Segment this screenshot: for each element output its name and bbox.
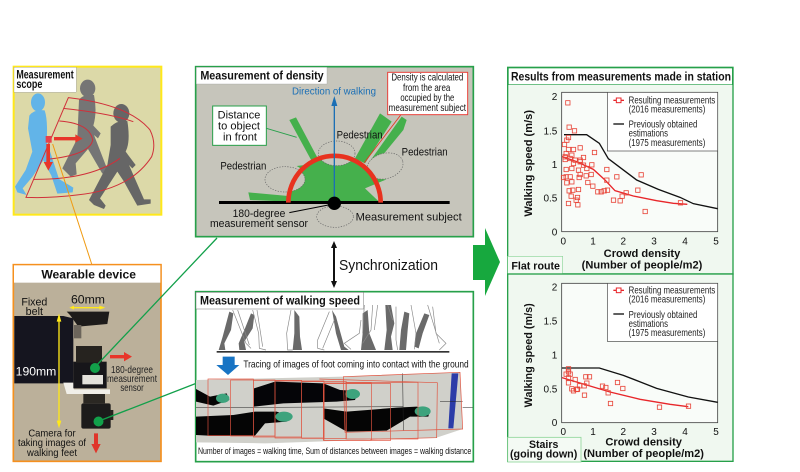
y axis labels: 1 <box>552 160 558 171</box>
label: fixed belt: belt <box>26 306 43 318</box>
label: 180-degree sensor: measurement sensor <box>210 218 308 230</box>
legend <box>607 283 718 341</box>
legend <box>607 92 718 151</box>
photo: belt and device <box>14 312 113 429</box>
arrow: direction of walking <box>292 86 376 202</box>
legend: (2016 measurements) <box>629 104 705 115</box>
figure: blue measurement subject <box>15 93 73 195</box>
y axis labels: 1 <box>552 350 558 361</box>
label: flat route <box>508 256 563 274</box>
x axis labels: 1 <box>590 427 596 438</box>
connector: sensor to density panel <box>95 238 217 367</box>
marker: sensor point <box>328 197 341 210</box>
x axis title: Crowd density <box>604 248 681 260</box>
label: images formula: Number of images = walking time, Sum of distances between images = walking distance <box>198 446 471 456</box>
y axis labels: 0 <box>552 228 558 239</box>
y axis labels: 1.5 <box>543 317 558 328</box>
label: stairs going down <box>508 437 581 462</box>
x axis labels: 5 <box>713 237 719 248</box>
legend: estimations <box>629 319 668 330</box>
scatter: measurements <box>564 367 691 409</box>
chart: green scan area <box>248 113 407 203</box>
y axis labels: 2 <box>552 283 558 294</box>
panel: results from measurements in station <box>508 67 733 274</box>
label: camera: taking images of <box>18 438 86 449</box>
panel: measurement of density <box>196 67 473 237</box>
connector: camera to speed panel <box>99 383 197 421</box>
figure: gray pedestrian, rear <box>62 80 108 177</box>
label: stairs going down: Stairs <box>529 439 558 451</box>
labels: pedestrians: Pedestrian <box>337 130 383 142</box>
dimension: 190mm: 190mm <box>16 365 56 379</box>
x axis title: (Number of people/m2) <box>582 260 703 272</box>
panel: measurement scope <box>14 67 161 264</box>
x axis labels: 3 <box>651 237 657 248</box>
label: sensor <box>107 365 157 394</box>
panel: stairs results <box>508 274 733 462</box>
callout: distance to object: in front <box>223 132 257 144</box>
arrow: direction of walking: Direction of walking <box>292 86 376 97</box>
label: sensor: 180-degree <box>111 365 153 376</box>
arc: 180-degree measurement range <box>288 156 381 203</box>
label: camera <box>18 429 86 459</box>
x axis labels: 1 <box>590 237 596 248</box>
x axis labels: 3 <box>651 427 657 438</box>
y axis title: Walking speed (m/s) <box>523 303 535 407</box>
scope sector lines <box>26 98 154 198</box>
y axis labels: 0 <box>552 418 558 429</box>
chart: stairs <box>523 283 719 460</box>
label: measurement subject: Measurement subject <box>356 211 462 223</box>
dimension: 190mm <box>16 313 61 428</box>
legend: Previously obtained <box>629 310 697 321</box>
y axis labels: 1.5 <box>543 126 558 137</box>
legend: Previously obtained <box>629 120 697 131</box>
photo: stitched foot image strip <box>196 372 473 443</box>
callout: density calculation: Density is calculated <box>391 73 463 84</box>
legend: Resulting measurements <box>629 96 715 107</box>
label: sensor: measurement <box>107 374 157 385</box>
line: device callout <box>53 144 92 264</box>
heading: measurement of density: Measurement of density <box>200 69 324 83</box>
x axis labels: 0 <box>561 427 567 438</box>
heading: results: Results from measurements made in station <box>511 70 731 84</box>
label: flat route: Flat route <box>511 260 560 272</box>
callout: density calculation: occupied by the <box>400 93 454 104</box>
marker: camera dot <box>94 416 104 426</box>
label: 180-degree sensor <box>210 205 328 230</box>
icon: sensor and direction arrows <box>44 134 83 171</box>
arrow: camera direction <box>91 433 101 453</box>
x axis title <box>583 437 704 460</box>
label: measurement scope: scope <box>16 77 42 91</box>
arrow: sensor direction <box>110 352 132 361</box>
x axis labels <box>561 237 719 248</box>
callout: density calculation: measurement subject <box>389 103 466 114</box>
y axis labels: 0.5 <box>543 194 558 205</box>
marker: sensor dot <box>90 363 100 373</box>
pedestrian outlines <box>265 141 406 227</box>
label: stairs going down: (going down) <box>510 449 578 461</box>
y axis labels: 2 <box>552 92 558 103</box>
callout: density calculation: from the area <box>403 83 451 94</box>
x axis labels: 4 <box>682 427 688 438</box>
chart: flat route <box>523 92 719 272</box>
callout: distance to object: to object <box>218 121 260 133</box>
label: tracing: Tracing of images of foot coming into contact with the ground <box>243 360 469 371</box>
figure: gray pedestrian, front <box>89 104 151 209</box>
label: synchronization: Synchronization <box>339 257 438 274</box>
legend: Resulting measurements <box>629 286 715 297</box>
y axis labels <box>543 283 558 429</box>
line: previous estimation <box>562 368 718 402</box>
callout: distance to object: Distance <box>218 109 260 121</box>
axis: subject line <box>219 201 450 204</box>
label: camera: walking feet <box>26 448 77 459</box>
legend: (1975 measurements) <box>629 138 705 149</box>
panel: wearable device <box>13 265 161 461</box>
line: measured trend <box>562 378 688 407</box>
x axis title <box>582 248 703 272</box>
label: camera: Camera for <box>28 429 76 440</box>
y axis labels <box>543 92 558 239</box>
labels: pedestrians: Pedestrian <box>220 161 266 173</box>
callout: distance to object <box>213 106 297 145</box>
y axis labels: 0.5 <box>543 384 558 395</box>
x axis labels: 0 <box>561 237 567 248</box>
x axis labels: 2 <box>621 237 627 248</box>
labels: pedestrians <box>220 130 448 173</box>
arrow: tracing down <box>216 357 239 375</box>
line: measured trend <box>562 157 687 204</box>
heading: wearable device <box>14 265 160 283</box>
x axis labels <box>561 427 719 438</box>
illustration: walking leg sequence <box>217 305 449 353</box>
labels: pedestrians: Pedestrian <box>402 147 448 159</box>
legend: (2016 measurements) <box>629 294 705 305</box>
x axis labels: 2 <box>621 427 627 438</box>
label: fixed belt: Fixed <box>21 297 47 309</box>
dimension: 60mm: 60mm <box>71 292 105 306</box>
y axis title: Walking speed (m/s) <box>523 110 535 217</box>
callout: density calculation <box>364 72 468 163</box>
heading: wearable device: Wearable device <box>41 268 136 282</box>
label: 180-degree sensor: 180-degree <box>233 208 285 220</box>
heading: measurement of walking speed: Measurement of walking speed <box>200 294 360 308</box>
panel: measurement of walking speed <box>196 292 473 462</box>
label: fixed belt <box>21 297 47 318</box>
label: sensor: sensor <box>120 383 144 394</box>
legend: (1975 measurements) <box>629 328 705 339</box>
label: measurement scope <box>14 67 76 92</box>
x axis title: (Number of people/m2) <box>583 448 704 460</box>
label: measurement scope: Measurement <box>16 67 74 81</box>
x axis labels: 5 <box>713 427 719 438</box>
line: previous estimation <box>564 135 718 209</box>
arrow: synchronization <box>331 241 337 288</box>
scatter: measurements <box>561 101 683 214</box>
x axis labels: 4 <box>682 237 688 248</box>
arrow: big green flow arrow <box>473 228 500 296</box>
x axis title: Crowd density <box>605 437 683 449</box>
legend: estimations <box>629 129 668 140</box>
